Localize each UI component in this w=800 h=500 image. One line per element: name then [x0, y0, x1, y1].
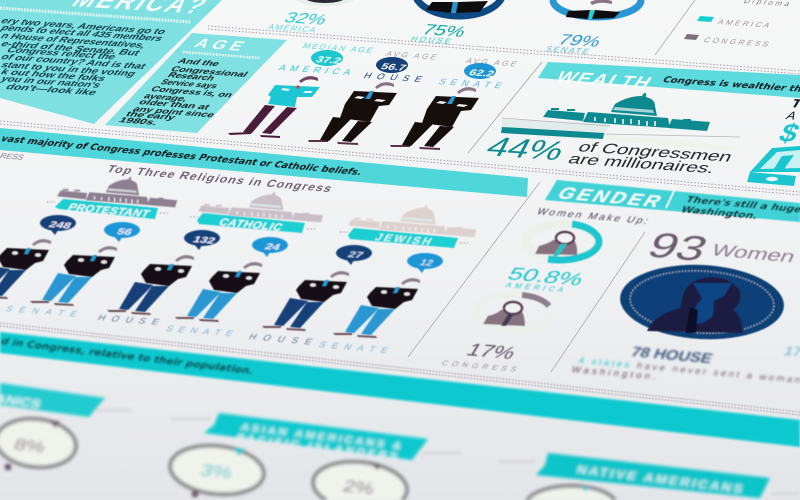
circle: asian america	[168, 441, 266, 499]
religion: jewish: JEWISH	[372, 232, 434, 248]
age text	[117, 57, 250, 126]
religion: jewish: HOUSE	[246, 332, 314, 347]
education stats: house: HOUSE	[409, 34, 454, 46]
panel: intro	[0, 0, 222, 124]
circle: asian congress	[313, 462, 407, 500]
dotted divider lower	[0, 323, 800, 415]
legend: AMERICA	[716, 18, 773, 29]
age: senate	[390, 56, 519, 150]
panel: age	[105, 33, 287, 133]
education stats: house: 75%	[419, 21, 470, 40]
intro text: you in our nation's	[0, 75, 103, 90]
religion: catholic: 132	[190, 235, 218, 246]
intro text: n House of Representatives,	[0, 32, 148, 50]
intro text: stant to you in the voting	[0, 61, 138, 79]
intro text	[0, 17, 168, 98]
education stats: senate: 79%	[555, 31, 605, 50]
ribbon: hispanics	[0, 383, 132, 471]
ribbon: native americans	[500, 453, 800, 500]
religion: catholic: CATHOLIC	[216, 217, 285, 233]
legend	[684, 0, 792, 48]
wealth right edge	[747, 98, 800, 186]
age text: And the	[176, 57, 222, 68]
big circle woman	[618, 261, 786, 343]
intro text: pends to elect all 435 members	[0, 24, 165, 44]
intro text: Congress reflect the	[4, 46, 118, 62]
circle: asian congress: 2%	[341, 476, 377, 498]
house and senate counts	[629, 344, 800, 367]
circle: native america	[527, 486, 615, 500]
age: america: 37.2	[313, 55, 344, 66]
age text: the early	[124, 110, 179, 121]
age heading: AGE	[191, 36, 248, 54]
education stats: america: 32%	[281, 9, 331, 28]
age: senate: AVG AGE	[464, 56, 519, 68]
age text: 1980s.	[117, 116, 160, 126]
legend: CONGRESS	[702, 36, 772, 48]
intro text: k out how the folks	[0, 68, 108, 84]
age: america	[228, 41, 375, 138]
ribbon: asian americans	[168, 413, 460, 500]
religion: protestant	[0, 177, 177, 318]
religion: jewish	[246, 205, 477, 356]
age: house	[308, 49, 439, 145]
intro text: of our country? And is that	[0, 53, 148, 71]
age text: any point since	[131, 105, 217, 119]
age text: Research	[166, 71, 217, 82]
millionaire caption	[565, 140, 735, 177]
age: america: MEDIAN AGE	[301, 41, 375, 55]
millionaire caption: of Congressmen	[575, 140, 735, 165]
age: house: 56.7	[378, 62, 409, 73]
women ring: america: AMERICA	[504, 281, 566, 294]
women ring: congress: CONGRESS	[440, 359, 519, 373]
religion: protestant: 56	[114, 227, 135, 238]
age text: average,	[142, 92, 190, 103]
women ring: america: 50.8%	[503, 264, 588, 290]
religion: protestant: SENATE	[4, 304, 79, 318]
panel: wealth	[481, 62, 800, 186]
44 percent: 44%	[481, 132, 570, 166]
93 women: 93	[641, 226, 714, 269]
wealth right edge: A	[783, 109, 800, 122]
age: house: HOUSE	[361, 71, 424, 85]
circle: asian america: 3%	[198, 460, 235, 482]
age: america: AMERICA	[276, 63, 354, 78]
93 women: Women	[708, 240, 799, 266]
millionaire caption: are millionaires.	[565, 152, 718, 177]
age: senate: 62.2	[466, 68, 497, 79]
ribbon: asian americans: PACIFIC ISLANDERS	[235, 432, 399, 462]
gender footnote: 4 states have never sent a woman	[577, 356, 800, 385]
women ring: congress: 17%	[462, 340, 520, 363]
women ring: america	[503, 224, 599, 294]
age text: Congressional	[169, 65, 250, 79]
age text: Congress is, on	[149, 85, 235, 99]
capitol icon	[543, 93, 710, 131]
wealth heading: WEALTH	[551, 68, 655, 92]
population band: d in Congress, relative to their population.	[0, 335, 256, 377]
religion band: vast majority of Congress professes Protestant or Catholic beliefs.	[0, 134, 364, 178]
religion: catholic: SENATE	[163, 324, 235, 339]
age: senate: SENATE	[436, 77, 504, 91]
intro text: ery two years, Americans go to	[0, 17, 168, 37]
religion: protestant: PROTESTANT	[65, 202, 152, 220]
house and senate counts: 78 HOUSE	[629, 345, 715, 367]
religion: catholic	[95, 192, 323, 339]
women ring: congress	[440, 294, 549, 373]
religion: jewish: 27	[345, 250, 366, 261]
education stats: america	[266, 0, 357, 34]
ribbon: native americans: NATIVE AMERICANS	[575, 463, 744, 495]
circle: hispanics: 8%	[12, 435, 48, 456]
93 women	[641, 226, 799, 269]
panel: gender	[534, 180, 800, 226]
panel: gender: There's still a huge	[683, 195, 800, 215]
religion: catholic: 24	[262, 242, 283, 253]
religion: jewish: 12	[417, 258, 436, 269]
religion: protestant: 248	[46, 220, 74, 231]
education stats: america: AMERICA	[266, 22, 319, 34]
education stats: senate	[544, 0, 641, 56]
intro text: e-third of the Senate. But	[0, 40, 143, 58]
religion: jewish: SENATE	[316, 340, 390, 356]
religion band	[0, 128, 528, 197]
intro text: don't—look like	[3, 83, 99, 98]
gender footnote: Washington.	[570, 365, 657, 381]
age text: Service says	[159, 78, 220, 90]
gender heading: GENDER	[553, 184, 665, 211]
education stats: house	[409, 0, 503, 46]
population band	[0, 332, 800, 447]
panel: wealth: Congress is wealthier th	[660, 75, 800, 94]
religion: catholic: HOUSE	[95, 313, 161, 327]
education stats: senate: SENATE	[544, 44, 592, 56]
panel: gender: Washington.	[678, 205, 760, 221]
religion heading: Top Three Religions in Congress	[104, 163, 336, 195]
age: house: AVG AGE	[384, 49, 439, 61]
section dividers	[0, 0, 800, 372]
women make up: Women Make Up:	[534, 207, 650, 226]
millionaire bar	[501, 118, 740, 150]
ribbon: asian americans: ASIAN AMERICANS &	[239, 422, 403, 452]
age text: older than at	[137, 98, 212, 111]
